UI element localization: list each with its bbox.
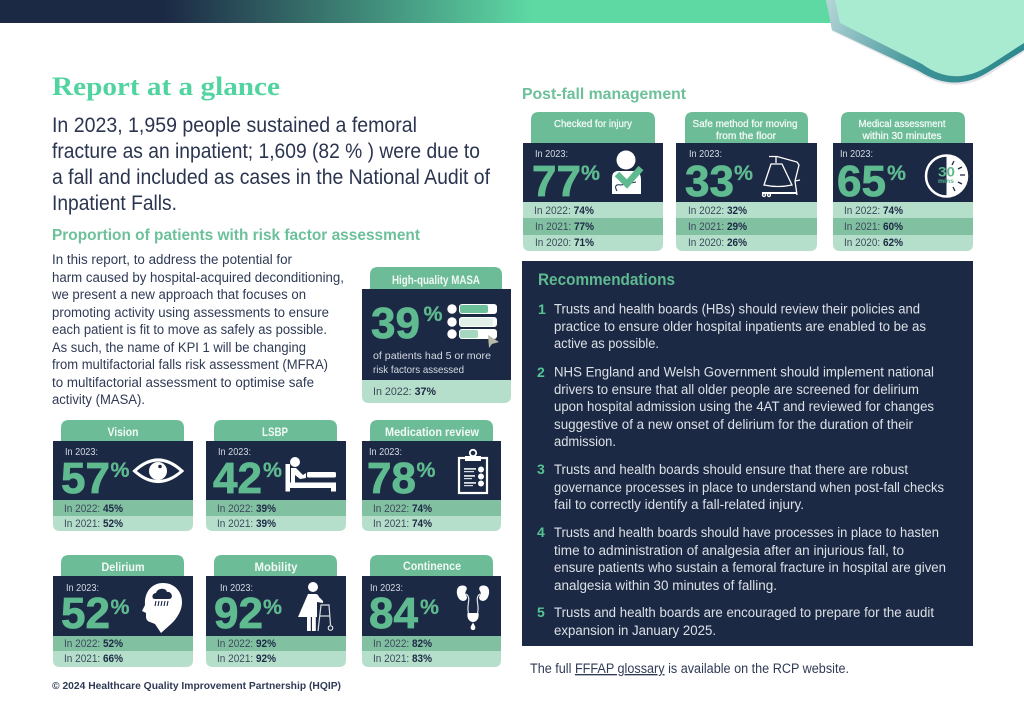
prior years: In 2022: 74% — [534, 205, 594, 217]
value: In 2023: — [65, 446, 98, 458]
recommendation 2 — [537, 364, 934, 449]
card: Vision — [53, 420, 193, 531]
recommendation 4: ensure patients who sustain a femoral fracture in hospital are given — [554, 560, 946, 575]
copyright: © 2024 Healthcare Quality Improvement Partnership (HQIP) — [52, 680, 341, 692]
recommendation 2: NHS England and Welsh Government should implement national — [554, 364, 934, 380]
icon: head with rain cloud — [142, 583, 182, 633]
recommendation 4: Trusts and health boards should have processes in place to hasten — [554, 525, 939, 540]
recommendation 2: suggestive of a new onset of delirium for the duration of their — [554, 417, 913, 432]
icon: patient lifting hoist — [762, 156, 800, 196]
corner decoration — [826, 0, 1024, 85]
recommendation 3 — [537, 461, 944, 512]
card label — [692, 118, 798, 142]
prior years: In 2021: 52% — [64, 518, 123, 530]
value 39%: % — [424, 303, 443, 326]
value: % — [110, 596, 130, 619]
title: Report at a glance — [52, 72, 280, 101]
prior years — [534, 205, 594, 249]
icon: clipboard — [459, 450, 487, 493]
prior years — [64, 503, 123, 530]
recommendation 1 — [538, 301, 926, 351]
card label: Safe method for moving — [692, 118, 798, 130]
value: % — [416, 459, 436, 482]
card: Safe method for moving — [676, 112, 817, 251]
prior years: In 2020: 62% — [844, 237, 903, 249]
prior years: In 2020: 71% — [535, 237, 594, 249]
body paragraph: we present a new approach that focuses on — [51, 287, 306, 302]
card label: Continence — [403, 561, 461, 573]
prior years: In 2022: 82% — [373, 638, 432, 650]
prior years: In 2022: 52% — [64, 638, 123, 650]
prior years — [688, 205, 747, 249]
value: % — [110, 459, 130, 482]
value: 33 — [685, 157, 734, 206]
prior years — [217, 638, 276, 665]
icon: 30 minute timer: 30 — [938, 164, 955, 180]
value — [369, 582, 439, 638]
prior years: In 2021: 60% — [844, 221, 903, 233]
body paragraph: to multifactorial assessment to optimise safe — [52, 375, 314, 390]
prior years: In 2022: 74% — [373, 503, 432, 515]
icon: 30 minute timer: mins — [938, 179, 955, 185]
prior years: In 2021: 74% — [373, 518, 432, 530]
prior year: In 2022: 37% — [373, 386, 436, 398]
card label: Medical assessment — [858, 118, 946, 130]
prior years: In 2022: 74% — [844, 205, 903, 217]
card: LSBP — [206, 420, 346, 531]
recommendation 4: time to administration of analgesia after an injurious fall, to — [554, 543, 904, 558]
intro statement: Inpatient Falls. — [52, 192, 177, 215]
value: % — [263, 459, 282, 482]
icon: person with walking frame — [298, 582, 333, 631]
value 39%: 39 — [371, 299, 420, 348]
card label: LSBP — [262, 427, 288, 439]
value: 42 — [213, 454, 262, 503]
heading: risk factor assessment: Proportion of patients with risk factor assessment — [52, 227, 421, 244]
body paragraph: activity (MASA). — [52, 392, 145, 407]
card: Checked for injury — [523, 112, 663, 251]
value: In 2023: — [369, 446, 402, 458]
value — [61, 582, 130, 638]
prior years — [373, 638, 432, 665]
recommendation 5: expansion in January 2025. — [554, 623, 716, 638]
icon: arm in sling with check mark — [612, 150, 641, 194]
recommendation 1: Trusts and health boards (HBs) should review their policies and — [554, 302, 920, 316]
value: % — [581, 162, 600, 185]
value: In 2023: — [535, 148, 568, 160]
prior years — [217, 503, 276, 530]
value — [367, 446, 436, 503]
value: 52 — [61, 589, 110, 638]
prior years: In 2022: 92% — [217, 638, 276, 650]
prior years — [64, 638, 123, 665]
recommendation 2: 2 — [537, 364, 545, 380]
prior years: In 2021: 39% — [217, 518, 276, 530]
recommendation 2: upon hospital admission using the 4AT and reviewed for changes — [554, 399, 934, 414]
prior years: In 2022: 45% — [64, 503, 123, 515]
recommendation 5: 5 — [537, 604, 545, 620]
card: Delirium — [53, 555, 193, 667]
value — [214, 582, 282, 638]
card: Medical assessment — [833, 112, 973, 251]
value — [61, 446, 130, 503]
value: In 2023: — [370, 582, 403, 594]
recommendation 1: 1 — [538, 301, 546, 317]
card label: High-quality MASA — [392, 275, 480, 287]
card: Medication review — [362, 420, 501, 531]
card: High-quality MASA — [362, 267, 511, 403]
recommendation 2: admission. — [554, 434, 616, 449]
value: In 2023: — [218, 446, 251, 458]
icon: patient in bed — [286, 457, 336, 492]
body paragraph: each patient is fit to move as safely as possible. — [52, 322, 327, 337]
value: 92 — [214, 589, 263, 638]
value: % — [420, 596, 439, 619]
card label: Mobility — [254, 562, 298, 574]
body paragraph: promoting activity using assessments to ensure — [52, 305, 329, 320]
card label: Delirium — [102, 562, 144, 574]
value 39% — [371, 299, 443, 348]
body paragraph: In this report, to address the potential for — [52, 252, 292, 267]
card label — [858, 118, 946, 142]
body paragraph — [51, 252, 344, 407]
value: 57 — [61, 454, 110, 503]
panel: recommendations — [522, 261, 973, 646]
recommendation 4: 4 — [537, 524, 545, 540]
recommendation 3: Trusts and health boards should ensure that there are robust — [554, 462, 908, 477]
body paragraph: harm caused by hospital-acquired deconditioning, — [52, 270, 344, 285]
recommendation 3: fail to correctly identify a fall-related injury. — [554, 497, 804, 512]
intro statement: In 2023, 1,959 people sustained a femoral — [52, 114, 417, 137]
recommendation 1: practice to ensure older hospital inpatients are enabled to be as — [554, 319, 926, 334]
description: of patients had 5 or more — [373, 350, 491, 362]
card label: Vision — [108, 427, 138, 439]
recommendation 3: 3 — [537, 461, 545, 477]
value: % — [263, 596, 282, 619]
icon: 30 minute timer — [926, 156, 967, 196]
value: In 2023: — [66, 582, 99, 594]
prior years: In 2021: 66% — [64, 653, 123, 665]
body paragraph: from multifactorial falls risk assessment (MFRA) — [52, 357, 328, 372]
prior years: In 2021: 83% — [373, 653, 432, 665]
recommendations heading: Recommendations — [538, 271, 675, 289]
value: 77 — [532, 157, 581, 206]
intro statement: a fall and included as cases in the National Audit of — [52, 166, 490, 189]
recommendation 4 — [537, 524, 946, 593]
prior years: In 2020: 26% — [688, 237, 747, 249]
recommendation 3: governance processes in place to understand when post-fall checks — [554, 480, 944, 495]
icon: kidneys and bladder — [457, 585, 489, 630]
recommendation 1: active as possible. — [554, 336, 659, 351]
value: 78 — [367, 454, 416, 503]
value: % — [887, 162, 906, 185]
value — [213, 446, 282, 503]
card label: within 30 minutes — [862, 130, 942, 142]
body paragraph: As such, the name of KPI 1 will be changing — [52, 340, 306, 355]
glossary note: The full FFFAP glossary is available on the RCP website. — [530, 661, 849, 676]
prior years: In 2021: 92% — [217, 653, 276, 665]
intro statement: fracture as an inpatient; 1,609 (82 % ) were due to — [52, 140, 480, 163]
value: % — [734, 162, 753, 185]
card label: Medication review — [385, 427, 479, 439]
recommendation 2: drivers to ensure that all older people are screened for delirium — [554, 382, 919, 397]
recommendation 5: Trusts and health boards are encouraged to prepare for the audit — [554, 605, 934, 620]
value — [837, 148, 906, 206]
prior years: In 2021: 29% — [688, 221, 747, 233]
recommendation 4: analgesia within 30 minutes of falling. — [554, 578, 777, 593]
icon: eye — [134, 460, 182, 482]
prior years: In 2022: 32% — [688, 205, 747, 217]
prior years — [373, 503, 432, 530]
card label: from the floor — [716, 130, 776, 142]
value: In 2023: — [689, 148, 722, 160]
recommendation 5 — [537, 604, 934, 638]
value — [532, 148, 600, 206]
card label: Checked for injury — [554, 118, 633, 130]
value: In 2023: — [220, 582, 253, 594]
icon: assessment form — [447, 304, 499, 348]
prior years: In 2021: 77% — [535, 221, 594, 233]
header gradient bar — [0, 0, 1024, 23]
card: Mobility — [206, 555, 346, 667]
value: In 2023: — [840, 148, 873, 160]
description — [373, 350, 491, 376]
value — [685, 148, 753, 206]
card: Continence — [362, 555, 501, 667]
prior years: In 2022: 39% — [217, 503, 276, 515]
prior years — [844, 205, 903, 249]
intro statement — [52, 114, 490, 215]
heading: post-fall management: Post-fall management — [522, 86, 687, 103]
value: 65 — [837, 157, 886, 206]
description: risk factors assessed — [373, 364, 464, 376]
value: 84 — [369, 589, 418, 638]
